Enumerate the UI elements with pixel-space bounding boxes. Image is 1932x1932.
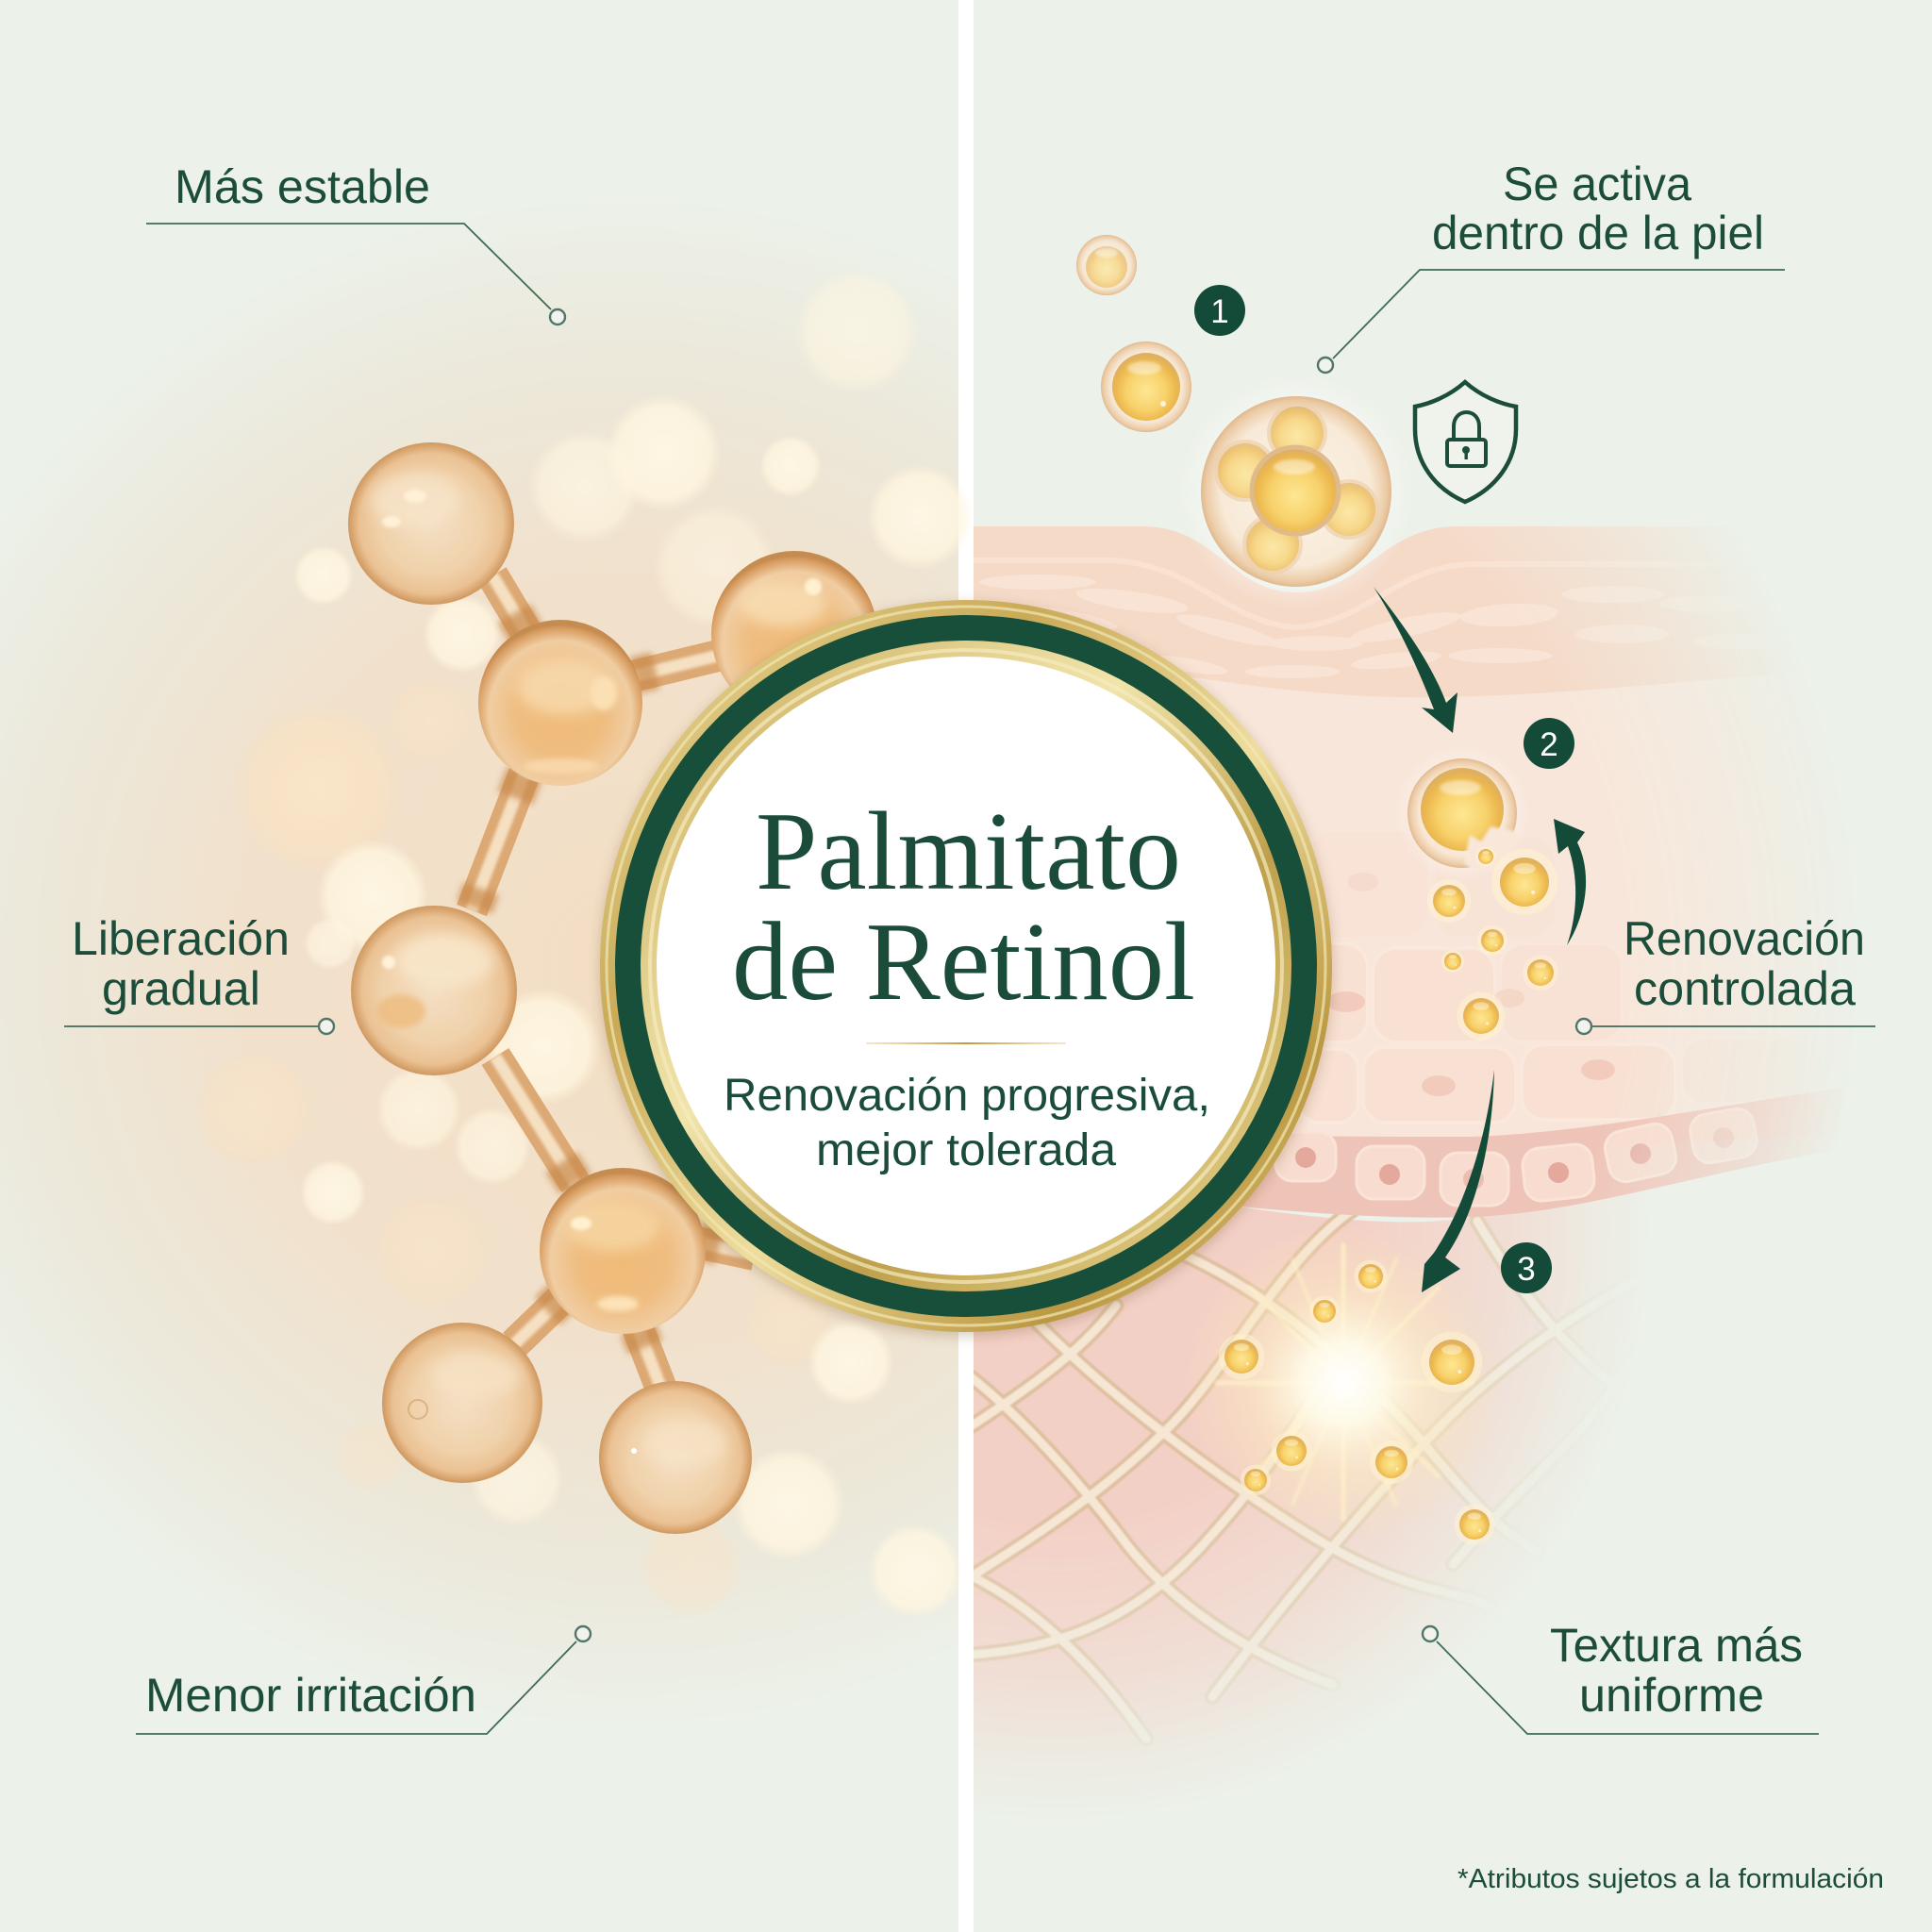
callout: Liberación gradual: Liberación xyxy=(72,912,290,965)
bokeh lights xyxy=(194,270,973,1618)
arrow: into skin xyxy=(1374,587,1457,733)
stratum corneum bands xyxy=(974,526,1703,698)
white centre divider xyxy=(958,0,974,1932)
callout: Liberación gradual: gradual xyxy=(102,962,260,1015)
sphere: top left xyxy=(348,442,514,605)
title xyxy=(732,789,1195,1024)
badge: step 2: 2 xyxy=(1540,726,1558,763)
cell nuclei xyxy=(1327,873,1615,1096)
callout: Se activa dentro de la piel xyxy=(1318,158,1785,373)
released droplets xyxy=(1427,846,1558,1041)
callout: Textura más uniforme: uniforme xyxy=(1579,1669,1764,1722)
badge: step 3: 3 xyxy=(1517,1251,1536,1288)
callout: Liberación gradual xyxy=(64,912,334,1034)
callout: Menor irritación: Menor irritación xyxy=(145,1669,476,1722)
callout: Más estable xyxy=(146,160,565,325)
collagen fibres xyxy=(974,1214,1577,1745)
panel background: left xyxy=(0,0,958,1932)
basal layer xyxy=(1241,1092,1811,1218)
icon: free droplet medium xyxy=(1101,341,1191,432)
sphere: bottom left xyxy=(382,1323,542,1483)
arrow: controlled renewal xyxy=(1554,819,1586,945)
title: de Retinol xyxy=(732,899,1195,1024)
sphere: upper right partly hidden xyxy=(711,551,877,717)
badge: step 2 xyxy=(1524,718,1574,769)
molecule bonds xyxy=(472,575,755,1406)
callout: Menor irritación xyxy=(136,1626,591,1734)
callout: Renovación controlada: Renovación xyxy=(1624,912,1865,965)
icon: opening capsule xyxy=(1394,745,1530,881)
panel: skin cross-section xyxy=(974,526,1767,1137)
icon: encapsulated capsule xyxy=(1178,374,1414,609)
badge: step 3 xyxy=(1501,1242,1552,1293)
starburst xyxy=(1183,1223,1504,1543)
sphere: bottom right xyxy=(599,1381,752,1534)
callout: Se activa dentro de la piel: dentro de la piel xyxy=(1432,207,1764,259)
central medallion xyxy=(600,600,1332,1336)
dermis droplets xyxy=(1219,1259,1495,1545)
sphere: middle left xyxy=(351,906,517,1075)
subtitle: Renovación progresiva, xyxy=(724,1071,1210,1121)
callout: Más estable: Más estable xyxy=(175,160,430,213)
icon: shield with lock xyxy=(1415,382,1516,502)
epidermis base xyxy=(1191,677,1738,1137)
badge: step 1: 1 xyxy=(1210,293,1229,330)
subtitle xyxy=(724,1071,1210,1175)
callout: Se activa dentro de la piel: Se activa xyxy=(1503,158,1691,210)
footnote: *Atributos sujetos a la formulación xyxy=(1457,1864,1884,1894)
title rule xyxy=(866,1042,1066,1044)
sphere: lower centre xyxy=(540,1168,706,1334)
dermis with collagen fibres xyxy=(974,1204,1607,1751)
title: Palmitato xyxy=(756,789,1181,913)
arrow: to dermis xyxy=(1422,1070,1494,1292)
subtitle: mejor tolerada xyxy=(816,1125,1116,1175)
dermis xyxy=(974,1204,1581,1751)
molecule xyxy=(348,442,877,1534)
spinous cells xyxy=(1264,830,1823,1123)
callout: Renovación controlada: controlada xyxy=(1634,962,1856,1015)
callout: Textura más uniforme xyxy=(1423,1619,1819,1734)
sphere: upper centre xyxy=(478,620,642,786)
callout: Renovación controlada xyxy=(1576,912,1875,1034)
badge: step 1 xyxy=(1194,285,1245,336)
callout: Textura más uniforme: Textura más xyxy=(1550,1619,1803,1672)
panel background: right xyxy=(974,0,1932,1932)
icon: free droplet small xyxy=(1076,235,1137,295)
